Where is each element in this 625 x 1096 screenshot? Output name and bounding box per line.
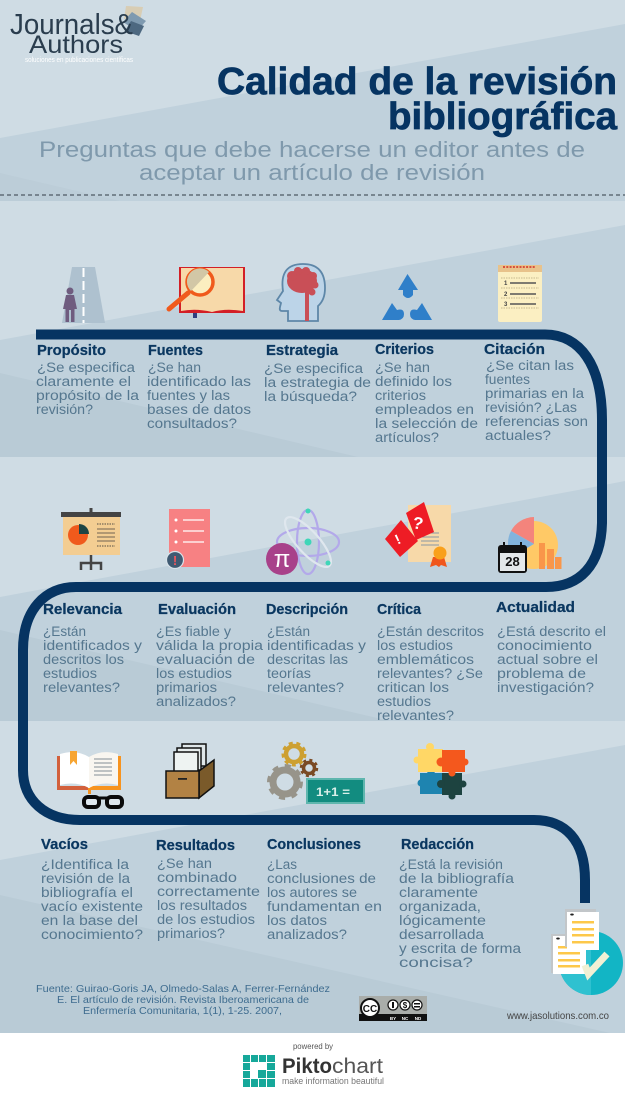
step: Crítica: los estudios	[377, 638, 453, 653]
icon: document with alert: !	[173, 553, 177, 568]
step: Propósito: propósito de la	[36, 388, 140, 403]
step: Relevancia: relevantes?	[43, 680, 120, 695]
step: Estrategia	[264, 342, 371, 404]
step: Citación: referencias son	[485, 414, 588, 429]
footer: powered by Piktochart: chart	[332, 1055, 383, 1078]
step: Estrategia: la búsqueda?	[264, 389, 357, 404]
step: Redacción: concisa?	[399, 955, 473, 970]
step: Criterios: la selección de	[375, 416, 478, 431]
step: Evaluación: Evaluación	[158, 601, 236, 618]
step: Propósito	[36, 342, 140, 417]
step: Crítica: relevantes?	[377, 708, 454, 723]
step: Actualidad: ¿Está descrito el	[497, 624, 606, 639]
icon: presentation board	[61, 508, 121, 570]
step: Descripción: identificadas y	[267, 638, 366, 653]
step: Descripción: ¿Están	[267, 624, 310, 639]
step: Conclusiones: los datos	[267, 913, 327, 928]
step: Resultados: correctamente	[157, 884, 260, 899]
step: Fuentes: Fuentes	[148, 342, 203, 359]
step: Redacción: lógicamente	[399, 913, 486, 928]
creative commons badge: ND	[415, 1016, 422, 1021]
step: Citación: actuales?	[485, 428, 551, 443]
timeline path	[23, 334, 602, 903]
icon: atom with pi: π	[274, 546, 290, 573]
step: Descripción: relevantes?	[267, 680, 344, 695]
logo: Journals & Authors: Journals&	[10, 9, 133, 41]
step: Redacción: organizada,	[399, 899, 481, 914]
step: Redacción: claramente	[399, 885, 478, 900]
step: Redacción: y escrita de forma	[399, 941, 522, 956]
step: Crítica	[377, 601, 484, 723]
step: Citación: fuentes	[485, 372, 530, 387]
icon: document with alert	[166, 509, 210, 568]
step: Estrategia: la estrategia de	[264, 375, 371, 390]
step: Citación	[484, 341, 588, 443]
logo: Journals & Authors: soluciones en publicaciones científicas	[25, 57, 133, 64]
icon: documents with check mark	[551, 909, 623, 995]
step: Relevancia: estudios	[43, 666, 97, 681]
step: Descripción	[266, 601, 366, 695]
step: Evaluación: los estudios	[156, 666, 232, 681]
step: Evaluación	[156, 601, 264, 709]
step: Vacíos: bibliografía el	[41, 885, 133, 900]
step: Vacíos: revisión de la	[41, 871, 131, 886]
step: Actualidad: investigación?	[497, 680, 594, 695]
step: Criterios: criterios	[375, 388, 426, 403]
step: Conclusiones: los autores se	[267, 885, 357, 900]
step: Resultados	[156, 837, 260, 941]
subtitle	[39, 137, 585, 185]
step: Propósito: Propósito	[37, 342, 106, 359]
step: Resultados: de los estudios	[157, 912, 255, 927]
step: Actualidad: actual sobre el	[497, 652, 598, 667]
creative commons badge: NC	[402, 1016, 409, 1021]
step: Redacción: de la bibliografía	[399, 871, 515, 886]
step: Crítica: critican los	[377, 680, 449, 695]
icon: certificate with warnings: ?	[411, 513, 425, 534]
step: Relevancia: Relevancia	[43, 601, 123, 618]
step: Relevancia: identificados y	[43, 638, 142, 653]
icon: puzzle pieces	[414, 743, 468, 800]
subtitle: Preguntas que debe hacerse un editor antes de	[39, 137, 585, 162]
step: Vacíos	[41, 836, 143, 942]
step: Crítica: ¿Están descritos	[377, 624, 484, 639]
icon: notepad	[498, 265, 542, 322]
step: Conclusiones	[267, 836, 382, 942]
step: Estrategia: ¿Se especifica	[264, 361, 364, 376]
step: Vacíos: conocimiento?	[41, 927, 143, 942]
step: Crítica: Crítica	[377, 601, 422, 618]
step: Citación: primarias en la	[485, 386, 585, 401]
step: Conclusiones: analizados?	[267, 927, 347, 942]
step: Relevancia: descritos los	[43, 652, 124, 667]
icon: three arrows	[382, 274, 432, 320]
icon: pie chart with calendar: 28	[505, 554, 520, 569]
step: Citación: ¿Se citan las	[486, 358, 574, 373]
step: Vacíos: Vacíos	[41, 836, 88, 853]
step: Descripción: descritas las	[267, 652, 348, 667]
step: Propósito: revisión?	[36, 402, 93, 417]
step: Actualidad	[496, 599, 606, 695]
step: Evaluación: analizados?	[156, 694, 236, 709]
creative commons badge: BY	[390, 1016, 396, 1021]
step: Redacción	[399, 836, 522, 970]
step: Fuentes: fuentes y las	[147, 388, 230, 403]
Piktochart logo mark	[243, 1055, 275, 1087]
step: Fuentes: ¿Se han	[148, 360, 201, 375]
footer: powered by Piktochart: Pikto	[282, 1055, 332, 1078]
step: Vacíos: vacío existente	[41, 899, 143, 914]
icon: archive box	[166, 744, 214, 798]
icon: open book with glasses	[57, 751, 122, 807]
icon: notepad: 1	[504, 281, 508, 287]
step: Redacción: desarrollada	[399, 927, 485, 942]
step: Evaluación: primarios	[156, 680, 217, 695]
step: Fuentes: bases de datos	[147, 402, 251, 417]
step: Fuentes: identificado las	[147, 374, 251, 389]
step: Conclusiones: conclusiones de	[267, 871, 376, 886]
footer: powered by Piktochart: powered by	[293, 1042, 333, 1051]
step: Resultados: combinado	[157, 870, 237, 885]
step: Criterios	[375, 341, 478, 445]
icon: head with brain	[277, 264, 325, 321]
step: Criterios: artículos?	[375, 430, 439, 445]
icon: notepad: 3	[504, 302, 508, 308]
step: Descripción: teorías	[267, 666, 311, 681]
step: Estrategia: Estrategia	[266, 342, 339, 359]
step: Propósito: claramente el	[36, 374, 131, 389]
step: Crítica: emblemáticos	[377, 652, 474, 667]
title	[217, 61, 618, 138]
step: Actualidad: Actualidad	[496, 599, 575, 616]
step: Citación: Citación	[484, 341, 545, 358]
step: Citación: revisión? ¿Las	[485, 400, 577, 415]
source citation	[36, 983, 330, 1017]
logo: Journals & Authors	[10, 6, 146, 64]
step: Relevancia: ¿Están	[43, 624, 86, 639]
step: Evaluación: evaluación de	[156, 652, 255, 667]
step: Evaluación: ¿Es fiable y	[156, 624, 231, 639]
icon: gears and chalkboard: 1+1 =	[316, 785, 350, 799]
step: Conclusiones: Conclusiones	[267, 836, 361, 853]
step: Vacíos: en la base del	[41, 913, 138, 928]
source citation: Fuente: Guirao-Goris JA, Olmedo-Salas A, Ferrer-Fernández	[36, 983, 330, 995]
step: Criterios: Criterios	[375, 341, 434, 358]
step: Criterios: ¿Se han	[375, 360, 430, 375]
website: www.jasolutions.com.co	[506, 1010, 609, 1022]
creative commons badge	[359, 996, 427, 1021]
step: Redacción: ¿Está la revisión	[399, 857, 503, 872]
step: Crítica: relevantes? ¿Se	[377, 666, 483, 681]
icon: pie chart with calendar	[498, 517, 562, 573]
icon: atom with pi	[266, 508, 339, 575]
creative commons badge: $	[403, 1001, 408, 1010]
title: bibliográfica	[388, 96, 618, 138]
step: Crítica: estudios	[377, 694, 431, 709]
step: Redacción: Redacción	[401, 836, 474, 853]
icon: certificate with warnings	[385, 502, 451, 567]
step: Descripción: Descripción	[266, 601, 348, 618]
step: Propósito: ¿Se especifica	[37, 360, 136, 375]
step: Fuentes	[147, 342, 251, 431]
step: Resultados: ¿Se han	[157, 856, 212, 871]
step: Resultados: los resultados	[157, 898, 247, 913]
source citation: Enfermería Comunitaria, 1(1), 1-25. 2007,	[83, 1005, 282, 1017]
step: Actualidad: conocimiento	[497, 638, 592, 653]
subtitle: aceptar un artículo de revisión	[139, 160, 485, 185]
creative commons badge: CC	[363, 1004, 377, 1015]
title: Calidad de la revisión	[217, 61, 617, 103]
step: Actualidad: problema de	[497, 666, 586, 681]
icon: notepad: 2	[504, 292, 508, 298]
step: Resultados: primarios?	[157, 926, 225, 941]
icon: certificate with warnings: !	[392, 531, 403, 547]
step: Criterios: definido los	[375, 374, 452, 389]
logo: Journals & Authors: Authors	[29, 31, 123, 59]
step: Evaluación: válida la propia	[156, 638, 264, 653]
footer: powered by Piktochart: make information beautiful	[282, 1076, 384, 1086]
icon: gears and chalkboard	[269, 743, 364, 803]
step: Relevancia	[43, 601, 142, 695]
footer: powered by Piktochart	[243, 1042, 384, 1087]
step: Conclusiones: ¿Las	[267, 857, 297, 872]
step: Resultados: Resultados	[156, 837, 235, 854]
step: Vacíos: ¿Identifica la	[41, 857, 130, 872]
icon: road with person	[62, 267, 105, 323]
step: Criterios: empleados en	[375, 402, 474, 417]
icon: book with magnifier	[169, 267, 245, 318]
step: Conclusiones: fundamentan en	[267, 899, 382, 914]
step: Fuentes: consultados?	[147, 416, 237, 431]
source citation: E. El artículo de revisión. Revista Iberoamericana de	[57, 994, 309, 1006]
